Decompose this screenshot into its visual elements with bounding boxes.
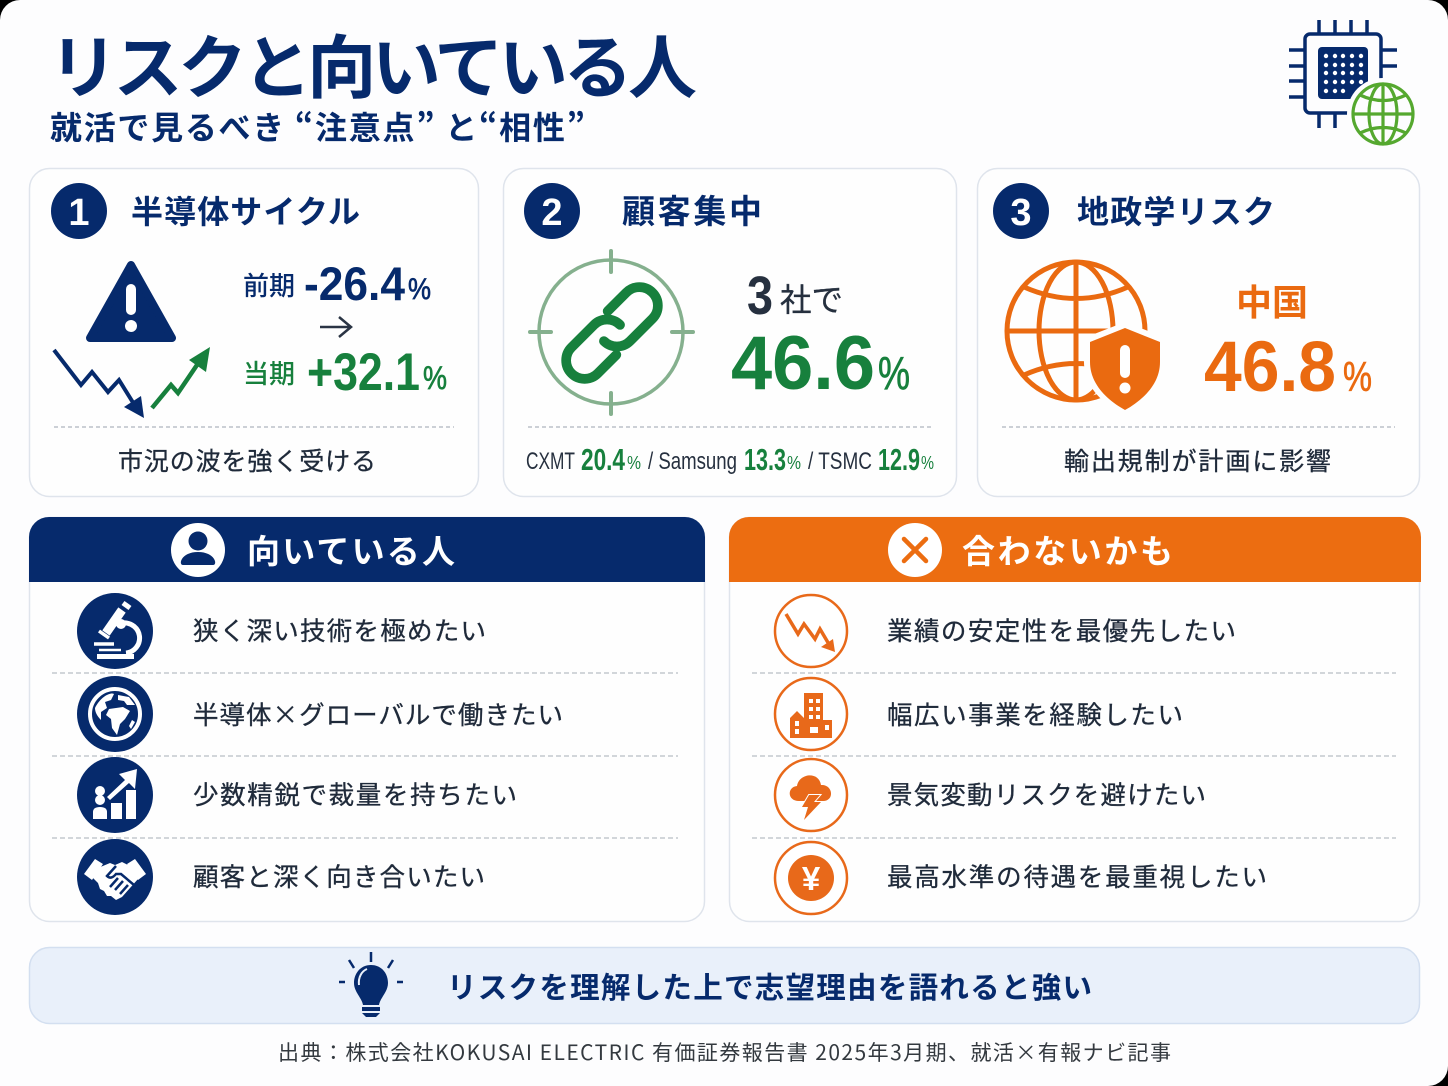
panel: suited people	[29, 517, 705, 922]
icon: handshake	[77, 839, 153, 915]
customer breakdown	[526, 442, 934, 477]
big figure 46.6%: 46.6	[731, 321, 875, 406]
current period figure	[243, 343, 447, 402]
previous period figure: -26.4	[304, 257, 405, 310]
panel: geopolitical risk	[978, 168, 1420, 496]
three companies label	[747, 266, 843, 326]
icon: buildings	[775, 678, 847, 750]
current period figure: 当期	[243, 354, 295, 391]
number badge 3	[993, 183, 1049, 239]
row text: 業績の安定性を最優先したい	[887, 611, 1236, 648]
heading: 顧客集中	[622, 185, 762, 233]
customer breakdown: 20.4	[581, 442, 626, 477]
panel: semiconductor cycle	[30, 168, 478, 496]
arrow: previous to current	[320, 317, 351, 337]
big figure 46.8%: %	[1343, 353, 1372, 400]
row text: 少数精鋭で裁量を持ちたい	[193, 775, 517, 812]
heading: 地政学リスク	[1077, 187, 1275, 233]
title: リスクと向いている人	[49, 12, 697, 112]
panel: may not suit	[729, 517, 1421, 922]
number badge 2: 2	[541, 192, 563, 234]
icon: chip and globe	[1289, 20, 1419, 150]
row text: 狭く深い技術を極めたい	[193, 611, 486, 648]
icon: falling arrow	[54, 350, 144, 418]
three companies label: 社で	[780, 275, 843, 321]
customer breakdown: %	[627, 453, 641, 473]
row text: 景気変動リスクを避けたい	[887, 775, 1206, 812]
icon: chain in target	[530, 251, 693, 414]
row text: 半導体×グローバルで働きたい	[193, 695, 563, 732]
previous period figure	[243, 257, 431, 310]
number badge 3: 3	[1010, 192, 1032, 234]
customer breakdown: %	[787, 453, 801, 473]
customer breakdown: 12.9	[878, 442, 920, 477]
header bar: 向いている人	[247, 525, 455, 573]
current period figure: %	[423, 360, 447, 396]
header bar: 合わないかも	[962, 525, 1173, 573]
icon: globe with shield	[1007, 262, 1166, 416]
number badge 2	[524, 183, 580, 239]
three companies label: 3	[747, 266, 773, 326]
icon: warning triangle	[90, 265, 172, 338]
customer breakdown: CXMT	[526, 448, 575, 475]
panel: customer concentration	[504, 168, 956, 496]
header bar	[729, 517, 1421, 582]
icon: rising arrow	[152, 347, 210, 408]
big figure 46.6%: %	[878, 347, 910, 399]
heading: 半導体サイクル	[131, 187, 360, 233]
icon: storm cloud	[775, 759, 847, 831]
China label: 中国	[1236, 274, 1308, 326]
caption: 市況の波を強く受ける	[118, 442, 376, 478]
number badge 1: 1	[68, 192, 90, 234]
row text: 幅広い事業を経験したい	[887, 695, 1183, 732]
row text: 顧客と深く向き合いたい	[193, 857, 485, 894]
customer breakdown: / TSMC	[808, 448, 872, 475]
row text: 最高水準の待遇を最重視したい	[887, 857, 1267, 894]
big figure 46.8%: 46.8	[1204, 328, 1336, 407]
icon: yen coin	[775, 842, 847, 914]
current period figure: +32.1	[307, 343, 420, 402]
customer breakdown: 13.3	[744, 442, 786, 477]
callout text: リスクを理解した上で志望理由を語れると強い	[447, 965, 1092, 1007]
icon: light bulb	[339, 952, 403, 1017]
icon: yen coin: ¥	[802, 860, 821, 897]
icon: earth	[77, 676, 153, 752]
header bar	[29, 517, 705, 582]
icon: chart and people	[77, 757, 153, 833]
caption: 輸出規制が計画に影響	[1064, 442, 1331, 478]
previous period figure: %	[408, 273, 431, 306]
customer breakdown: / Samsung	[648, 448, 737, 475]
icon: falling trend	[775, 595, 847, 667]
callout: key takeaway	[30, 948, 1420, 1024]
icon: microscope	[77, 593, 153, 669]
subtitle: 就活で見るべき “注意点” と“相性”	[50, 103, 585, 149]
previous period figure: 前期	[243, 266, 295, 303]
number badge 1	[51, 183, 107, 239]
source note: 出典：株式会社KOKUSAI ELECTRIC 有価証券報告書 2025年3月期、就活×有報ナビ記事	[278, 1037, 1171, 1067]
customer breakdown: %	[921, 453, 934, 473]
